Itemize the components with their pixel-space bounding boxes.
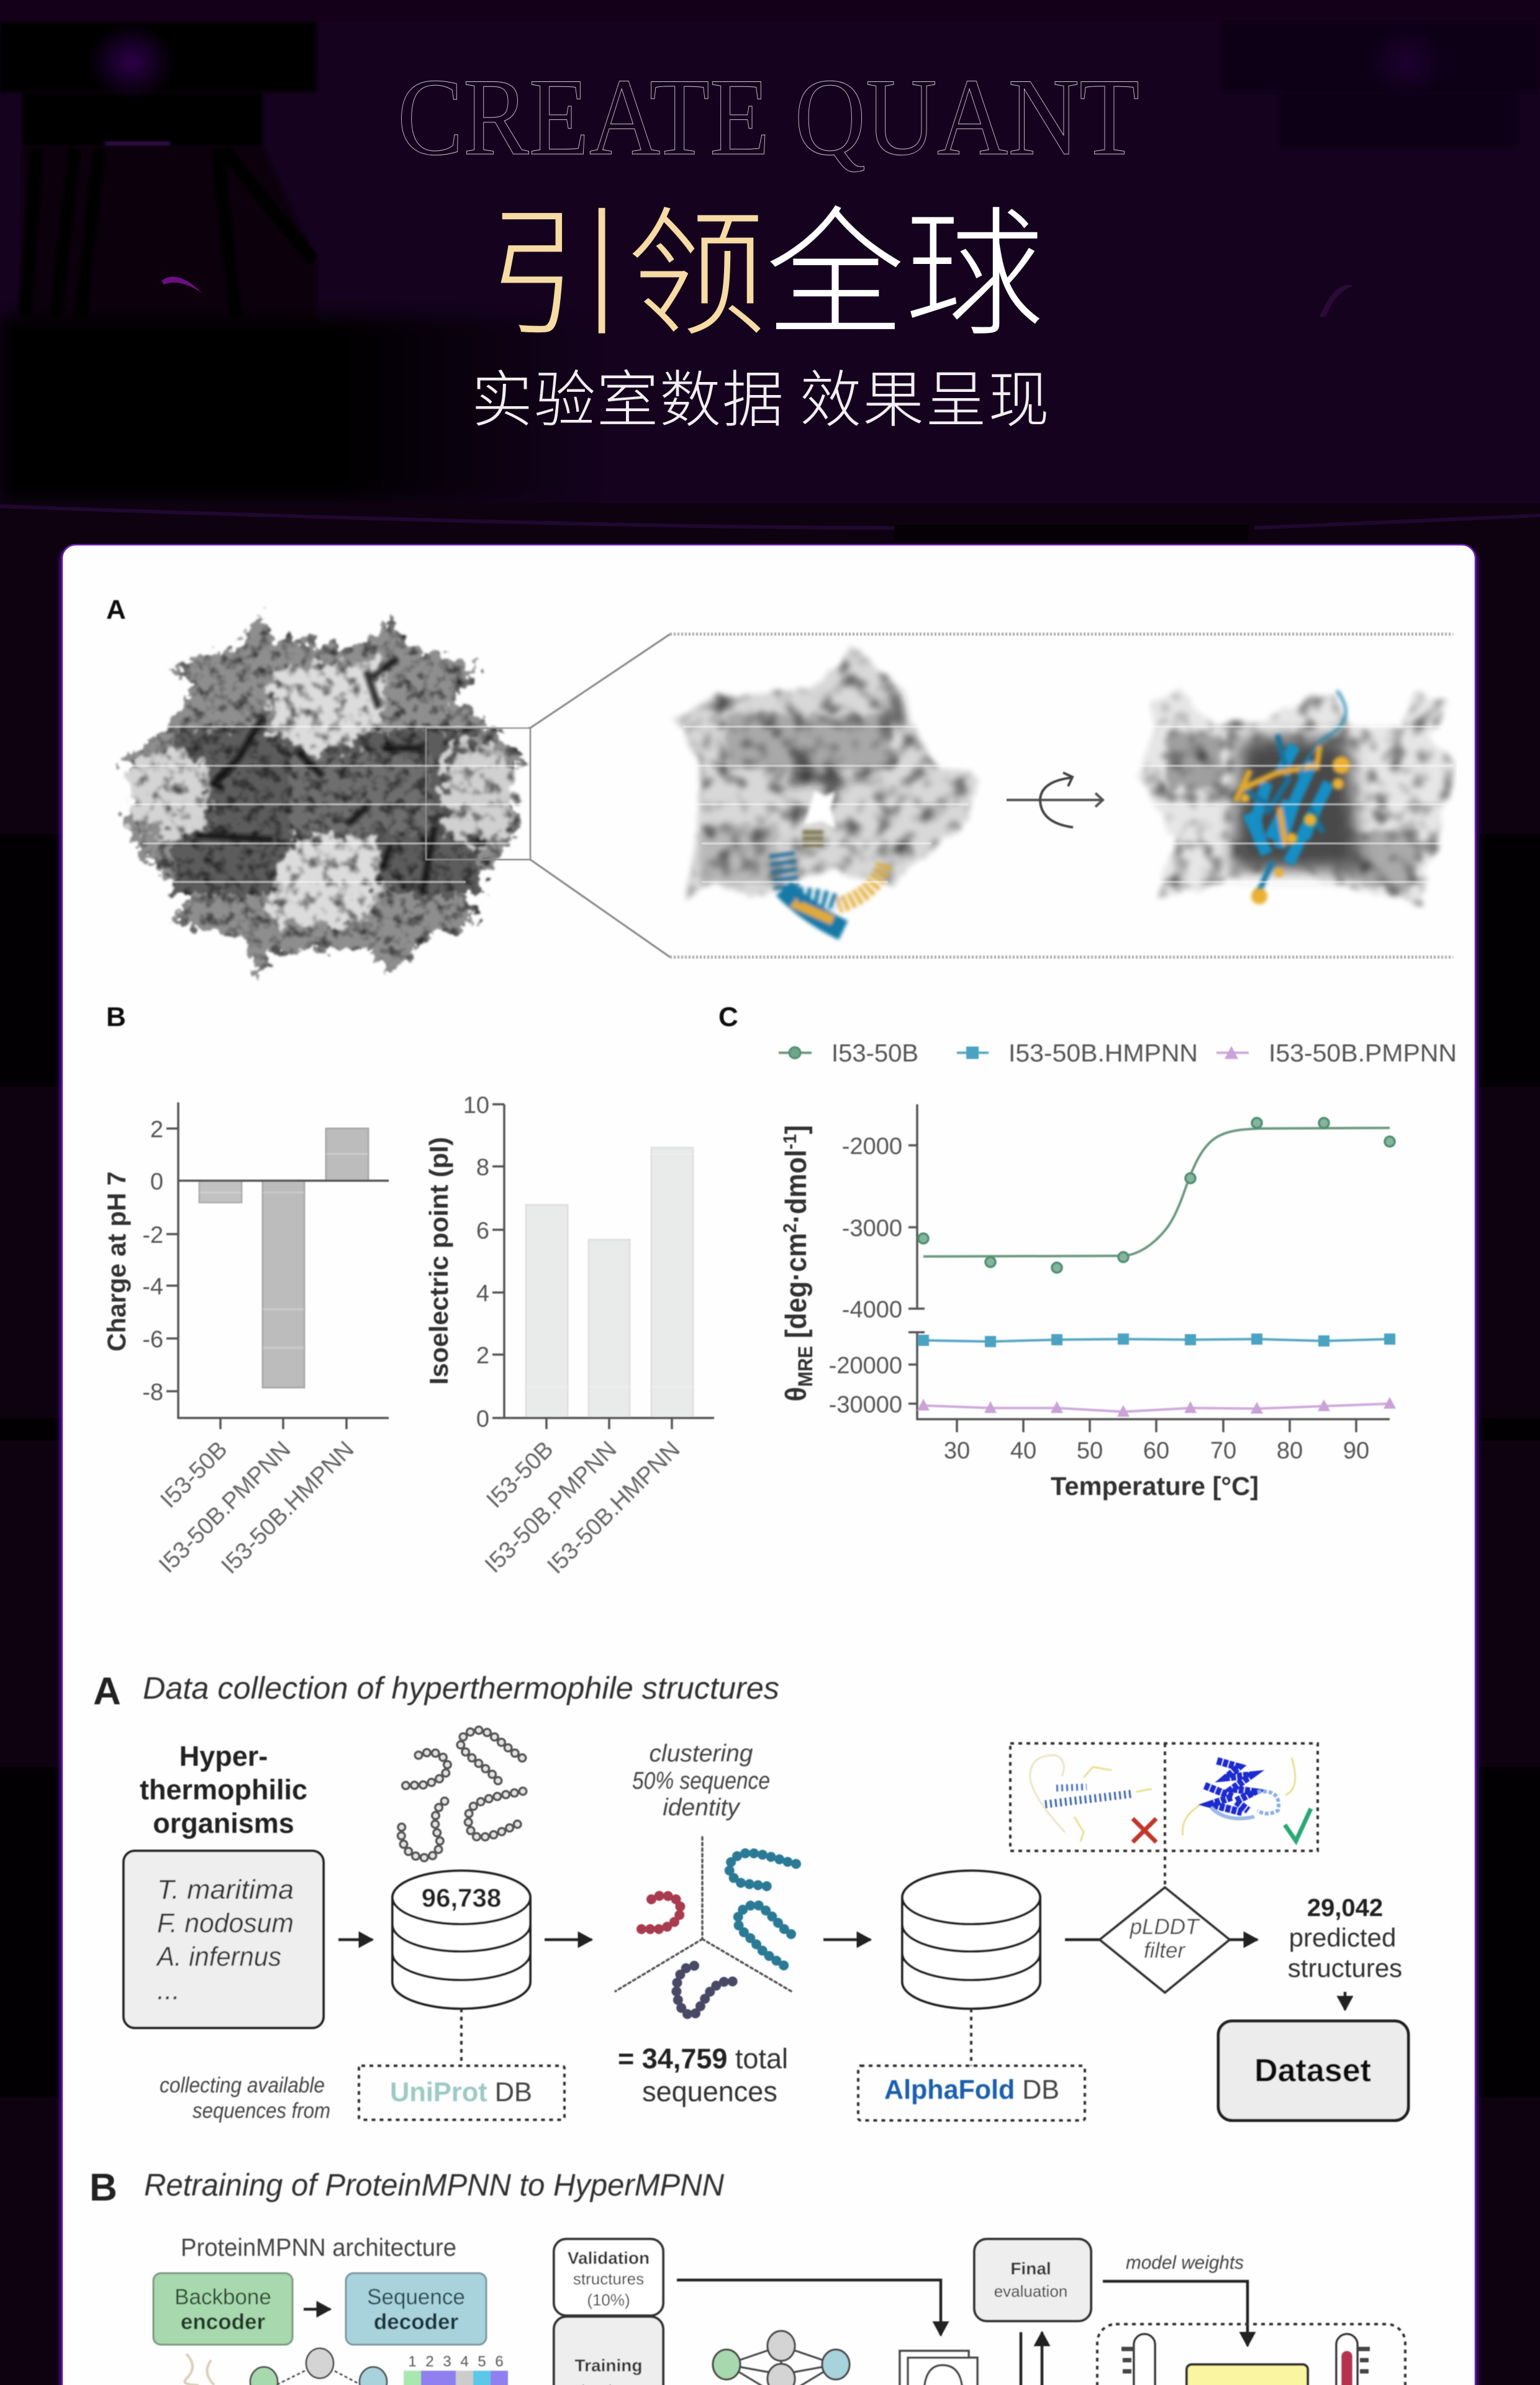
arrow: [304, 2308, 330, 2310]
chart: isoelectric point: 4: [476, 1281, 489, 1307]
organisms box: A. infernus: [155, 1942, 281, 1972]
training box: Training: [575, 2356, 642, 2375]
axis tick labels: -3000: [842, 1215, 902, 1242]
axis tick labels: -2000: [842, 1133, 902, 1160]
dotted connector: [460, 2009, 463, 2066]
yellow model box: [1187, 2365, 1308, 2385]
connector to filter: [1065, 1938, 1100, 1941]
validation box: [554, 2239, 663, 2315]
predicted structures count: predicted: [1289, 1923, 1396, 1952]
decorative stripes: [124, 727, 1453, 882]
icon: UniProt database: 96,738: [422, 1883, 501, 1912]
section heading: Retraining of ProteinMPNN to HyperMPNN: [144, 2168, 725, 2202]
caption: collecting sequences: sequences from: [192, 2099, 330, 2123]
predicted structures count: [1288, 1894, 1402, 1983]
training box: [554, 2317, 663, 2385]
axis tick labels: 50: [1077, 1438, 1103, 1464]
chart: charge at pH 7: -4: [142, 1274, 163, 1300]
icon: hot thermometer: [1336, 2334, 1370, 2385]
chart: charge at pH 7: -2: [142, 1222, 163, 1248]
dataset box: [1218, 2021, 1408, 2120]
total sequences: sequences: [642, 2076, 777, 2107]
UniProt box: [359, 2066, 564, 2120]
icon: right protein surface: [1139, 689, 1456, 904]
chart: charge at pH 7: I53-50B.PMPNN: [154, 1437, 296, 1578]
y axis title: ·dmol: [779, 1150, 812, 1224]
AlphaFold box: [858, 2066, 1085, 2120]
icon: cool thermometer: [1121, 2334, 1155, 2385]
arrow: [545, 1938, 592, 1941]
arrow: [1344, 1992, 1346, 2010]
arrow: [338, 1938, 373, 1941]
sequence decoder box: Sequence: [367, 2285, 465, 2309]
chart: isoelectric point: [424, 1093, 714, 1579]
axis tick labels: -30000: [829, 1392, 902, 1418]
clustering diagram: [615, 1837, 796, 2015]
clustering caption: clustering: [650, 1740, 753, 1767]
validation box: Validation: [568, 2248, 650, 2268]
dataset box: Dataset: [1254, 2053, 1371, 2089]
sequence decoder box: [346, 2273, 486, 2345]
y axis title: θ: [779, 1386, 812, 1401]
organisms box: ...: [157, 1975, 180, 2006]
sequence bars: 4: [460, 2353, 469, 2370]
axis tick labels: 80: [1277, 1438, 1303, 1464]
dashed thermal box: [1097, 2324, 1405, 2385]
chart: isoelectric point: 2: [476, 1343, 489, 1369]
network diagram: architecture: [250, 2348, 387, 2385]
axis tick labels: 30: [944, 1438, 970, 1464]
AlphaFold box: AlphaFold DB: [884, 2074, 1059, 2105]
y axis title: ]: [779, 1125, 812, 1134]
chart: isoelectric point: I53-50B.PMPNN: [480, 1437, 622, 1578]
chart axes: [908, 1104, 1390, 1432]
chart: isoelectric point: I53-50B.HMPNN: [543, 1437, 685, 1579]
icon: grey sequence chains: [401, 1730, 523, 1858]
backbone encoder box: [153, 2273, 292, 2345]
sequence bars: [404, 2353, 508, 2385]
section heading: B: [89, 2166, 117, 2209]
legend: I53-50B.PMPNN: [1269, 1040, 1457, 1067]
organisms heading: thermophilic: [140, 1774, 307, 1806]
section heading: Data collection of hyperthermophile structures: [143, 1671, 779, 1706]
sequence decoder box: decoder: [374, 2310, 458, 2334]
icon: middle protein surface: [674, 645, 981, 930]
chart: isoelectric point: 8: [476, 1155, 489, 1181]
icon: document stack: [900, 2351, 977, 2385]
ribbon helices: [782, 830, 884, 930]
legend: [779, 1040, 1457, 1067]
axis tick labels: 70: [1210, 1438, 1236, 1464]
series: I53-50B: [918, 1118, 1395, 1273]
chart: isoelectric point: 6: [476, 1218, 489, 1244]
arrow: [1230, 1938, 1257, 1941]
decorative stripes: [199, 1154, 693, 1387]
axis tick labels: [829, 1133, 1369, 1464]
axis tick labels: -4000: [842, 1297, 902, 1323]
label C: C: [718, 1002, 738, 1032]
icon: red cross: [1133, 1819, 1156, 1842]
chart: isoelectric point: 0: [476, 1406, 489, 1432]
legend: I53-50B: [831, 1040, 918, 1067]
chart: isoelectric point: Isoelectric point (pI): [424, 1137, 453, 1385]
sequence bars: 6: [495, 2353, 504, 2370]
final evaluation box: [974, 2239, 1091, 2321]
dotted connector: [970, 2009, 972, 2066]
pLDDT filter diamond: pLDDT: [1130, 1915, 1200, 1939]
organisms heading: [140, 1740, 307, 1839]
architecture caption: ProteinMPNN architecture: [181, 2234, 456, 2261]
validation box: structures: [573, 2269, 644, 2288]
zoom rectangle and guide lines: [426, 634, 1453, 957]
UniProt box: UniProt DB: [390, 2077, 532, 2107]
section A: data collection: [93, 1670, 1408, 2123]
icon: rotation arrow: [1007, 773, 1103, 827]
sequence bars: 2: [425, 2353, 434, 2370]
ribbon strands: [1236, 691, 1346, 896]
icon: green check: [1285, 1809, 1311, 1841]
icon: backbone trace: [185, 2354, 214, 2385]
chart: charge at pH 7: [102, 1102, 389, 1579]
final evaluation box: Final: [1010, 2259, 1051, 2278]
series: PMPNN: [917, 1397, 1396, 1417]
y axis title: 2: [780, 1224, 800, 1233]
sequence bars: 3: [443, 2353, 451, 2370]
chart: charge at pH 7: 0: [150, 1169, 163, 1195]
icon: large protein cage: [121, 612, 525, 976]
clustering caption: identity: [663, 1794, 741, 1821]
axis tick labels: -20000: [829, 1353, 902, 1379]
backbone encoder box: Backbone: [174, 2285, 271, 2309]
sequence bars: 1: [408, 2353, 417, 2370]
panel A: protein structures: [106, 594, 1456, 976]
title: CREATE QUANT: CREATE QUANT: [397, 55, 1139, 178]
pLDDT filter diamond: filter: [1144, 1938, 1185, 1963]
pLDDT filter diamond: [1100, 1888, 1230, 1992]
total sequences: = 34,759 total: [618, 2043, 788, 2074]
organisms box: [124, 1851, 324, 2028]
y axis title: [deg·cm: [779, 1233, 812, 1346]
chart: charge at pH 7: I53-50B: [156, 1437, 232, 1513]
final evaluation box: evaluation: [994, 2282, 1067, 2301]
low confidence structure: [1030, 1755, 1152, 1842]
network diagram: training: [713, 2331, 849, 2385]
subheading: 实验室数据 效果呈现: [471, 350, 1049, 439]
total sequences: [618, 2043, 788, 2107]
section B: retraining: [89, 2166, 1405, 2385]
legend: I53-50B.HMPNN: [1008, 1040, 1198, 1067]
axis tick labels: 40: [1010, 1438, 1036, 1464]
caption: collecting sequences: [160, 2073, 330, 2123]
organisms heading: Hyper-: [179, 1740, 268, 1772]
validation box: (10%): [587, 2291, 630, 2309]
y axis title: MRE: [794, 1346, 817, 1387]
validation arrow: [677, 2280, 941, 2335]
filter example box: [1010, 1743, 1318, 1888]
predicted structures count: structures: [1288, 1953, 1402, 1983]
label A: A: [106, 594, 126, 625]
model weights arrow: [1103, 2281, 1248, 2346]
high confidence structure: [1182, 1758, 1295, 1835]
icon: AlphaFold database: [902, 1871, 1040, 2009]
chart: isoelectric point: 10: [463, 1093, 489, 1119]
arrows to final evaluation: [1021, 2332, 1042, 2385]
chart: charge at pH 7: I53-50B.HMPNN: [217, 1437, 359, 1579]
organisms box: T. maritima: [157, 1874, 294, 1905]
axis tick labels: 90: [1343, 1438, 1369, 1464]
panel C: melting curve: [718, 1002, 1457, 1501]
caption: collecting sequences: collecting available: [160, 2073, 325, 2097]
chart: charge at pH 7: -6: [142, 1327, 163, 1353]
panel B: bar charts: [102, 1002, 714, 1579]
series: HMPNN: [918, 1333, 1395, 1347]
section heading: A: [93, 1670, 121, 1713]
panel: white card: [58, 545, 1479, 2385]
chart: charge at pH 7: -8: [142, 1379, 163, 1406]
arrow: [823, 1938, 871, 1941]
heading: 引领全球: 引领全球: [487, 161, 1044, 363]
chart: charge at pH 7: Charge at pH 7: [102, 1171, 131, 1352]
x axis title: Temperature [°C]: [1051, 1471, 1259, 1501]
clustering caption: [632, 1740, 770, 1821]
sequence bars: 5: [478, 2353, 486, 2370]
chart: charge at pH 7: 2: [150, 1117, 163, 1143]
icon: UniProt database: [392, 1871, 530, 2009]
y axis title: -1: [780, 1134, 800, 1150]
organisms box: F. nodosum: [157, 1908, 294, 1938]
model weights caption: model weights: [1126, 2251, 1244, 2273]
predicted structures count: 29,042: [1307, 1894, 1383, 1922]
organisms heading: organisms: [153, 1807, 294, 1839]
clustering caption: 50% sequence: [632, 1768, 770, 1794]
chart: isoelectric point: I53-50B: [482, 1437, 558, 1513]
label B: B: [106, 1002, 126, 1032]
backbone encoder box: encoder: [181, 2310, 265, 2334]
axis tick labels: 60: [1143, 1438, 1169, 1464]
